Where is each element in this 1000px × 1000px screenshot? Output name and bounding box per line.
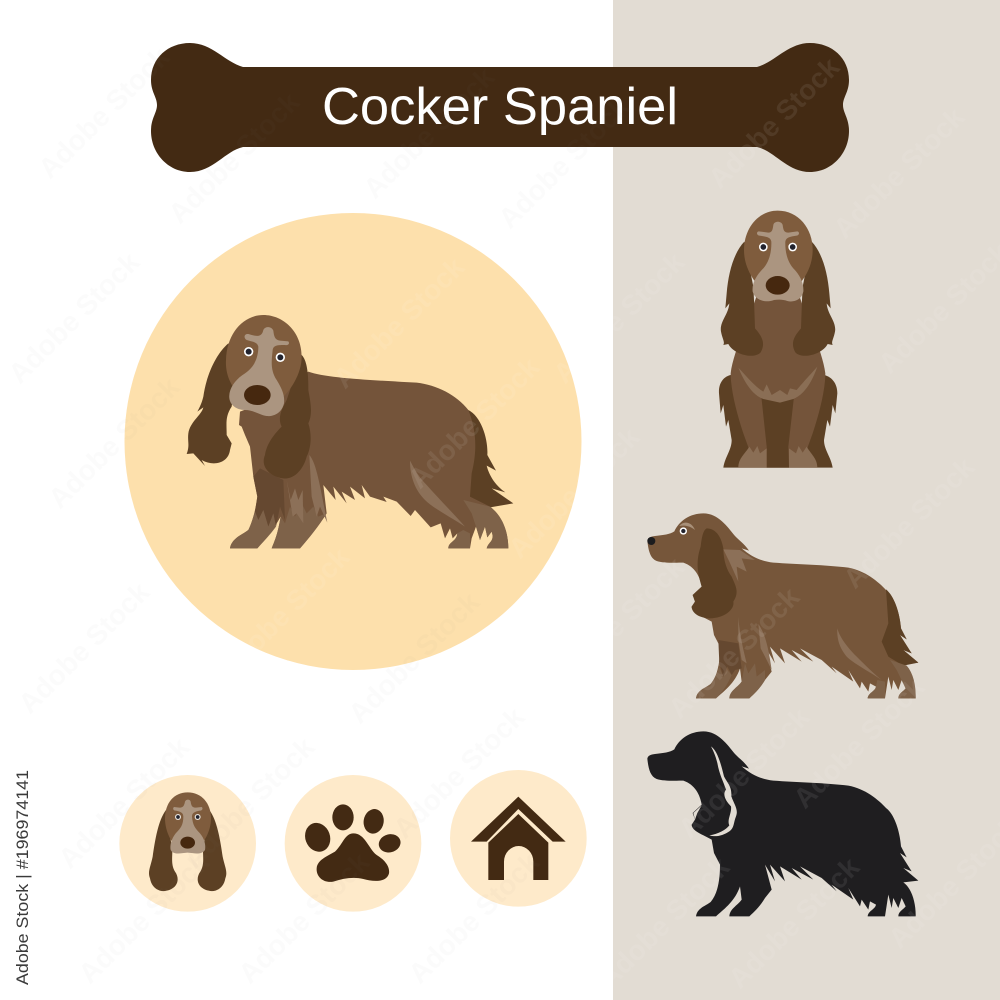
brow <box>679 523 695 530</box>
large cream circle <box>124 213 582 670</box>
title bone banner <box>151 43 849 172</box>
chest highlight <box>738 367 817 403</box>
house body with door <box>488 814 548 880</box>
lower legs <box>230 500 508 548</box>
nose <box>244 385 271 405</box>
eyes <box>175 814 201 820</box>
rear haunches <box>719 375 837 468</box>
head <box>744 211 813 294</box>
faint stock watermarks: Adobe Stock <box>342 586 486 729</box>
silhouette body <box>647 731 918 916</box>
faint stock watermarks: Adobe Stock <box>52 731 196 874</box>
faint stock watermarks: Adobe Stock <box>702 51 846 194</box>
faint stock watermarks: Adobe Stock <box>232 846 376 989</box>
faint stock watermarks: Adobe Stock <box>2 246 146 389</box>
faint stock watermarks: Adobe Stock <box>402 351 546 494</box>
faint stock watermarks: Adobe Stock <box>837 451 981 594</box>
faint stock watermarks: Adobe Stock <box>827 101 971 244</box>
faint stock watermarks: Adobe Stock <box>502 421 646 564</box>
fur highlights <box>723 549 882 680</box>
small circle: dog house icon <box>450 770 587 907</box>
eye <box>680 527 687 535</box>
faint stock watermarks: Adobe Stock <box>32 41 176 184</box>
title text: Cocker Spaniel <box>322 78 678 136</box>
jaw highlight <box>693 805 702 820</box>
right ear <box>793 242 835 356</box>
faint stock watermarks: Adobe Stock <box>42 371 186 514</box>
near ear <box>264 355 311 479</box>
nose <box>766 276 790 295</box>
main dog illustration: standing, looking at viewer <box>187 315 513 548</box>
blaze and muzzle <box>753 222 803 301</box>
ear outline highlight <box>709 746 737 836</box>
faint stock watermarks: Adobe Stock <box>162 86 306 229</box>
faint stock watermarks: Adobe Stock <box>387 701 531 844</box>
fur highlights <box>287 455 465 527</box>
front paws <box>738 446 817 468</box>
tail <box>882 589 918 666</box>
faint stock watermarks: Adobe Stock <box>177 731 321 874</box>
head <box>226 315 302 405</box>
faint stock watermarks: Adobe Stock <box>72 846 216 989</box>
small circle: paw print icon <box>285 775 421 912</box>
faint stock watermarks: Adobe Stock <box>662 581 806 724</box>
torso and front legs <box>731 290 825 468</box>
blaze and muzzle <box>170 800 205 853</box>
faint stock watermarks: Adobe Stock <box>547 246 691 389</box>
left ear <box>149 810 178 891</box>
vertical stock id text: Adobe Stock | #196974141 <box>13 770 32 985</box>
dark leg fringe <box>718 640 742 677</box>
roof <box>471 797 566 842</box>
circle background <box>450 770 587 907</box>
head <box>165 792 211 850</box>
body silhouette <box>647 513 918 698</box>
faint stock watermarks: Adobe Stock <box>492 91 636 234</box>
faint stock watermarks: Adobe Stock <box>12 576 156 719</box>
gap between front legs <box>761 397 794 468</box>
front view sitting dog <box>719 211 837 468</box>
ear <box>692 528 737 618</box>
black silhouette dog <box>647 731 918 916</box>
faint stock watermarks: Adobe Stock <box>402 846 546 989</box>
blaze and muzzle <box>229 327 289 416</box>
far ear <box>187 343 237 466</box>
dark upper front leg <box>253 468 285 527</box>
faint stock watermarks: Adobe Stock <box>212 541 356 684</box>
tail <box>465 410 513 507</box>
eyes <box>244 347 285 362</box>
body with chest, legs and fringed belly <box>230 372 508 548</box>
faint stock watermarks: Adobe Stock <box>787 671 931 814</box>
lower legs <box>696 660 916 698</box>
bone shape <box>151 43 849 172</box>
panel: right beige background <box>613 0 1000 1000</box>
circle background <box>285 775 421 912</box>
faint stock watermarks: Adobe Stock <box>327 251 471 394</box>
circle background <box>119 775 256 912</box>
faint stock watermarks: Adobe Stock <box>592 851 736 994</box>
faint stock watermarks: Adobe Stock <box>722 851 866 994</box>
nose <box>647 537 655 545</box>
right ear <box>198 810 226 891</box>
main pad <box>317 833 389 882</box>
small circle: dog head icon <box>119 775 256 912</box>
toes <box>301 804 403 855</box>
faint stock watermarks: Adobe Stock <box>672 701 816 844</box>
left ear <box>721 242 763 356</box>
eyes <box>759 243 797 251</box>
faint stock watermarks: Adobe Stock <box>547 551 691 694</box>
side view colored dog <box>647 513 918 698</box>
faint stock watermarks: Adobe Stock <box>357 61 501 204</box>
nose <box>180 837 195 849</box>
